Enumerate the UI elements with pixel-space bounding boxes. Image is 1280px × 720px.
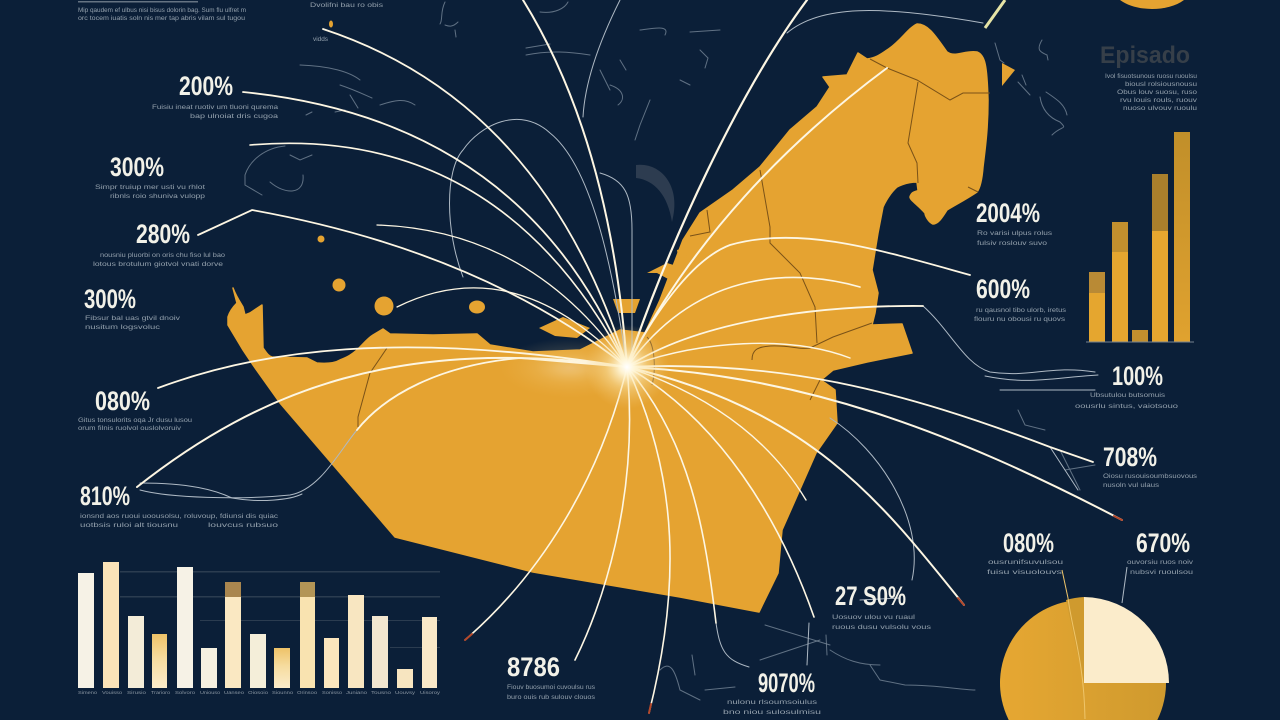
- stat: 9070%: 9070%: [758, 668, 815, 698]
- ray end markers: [465, 516, 1122, 713]
- stat: 8786: [507, 652, 596, 701]
- axis labels: Siounno: [272, 690, 294, 695]
- islands: faint outlines: [245, 2, 1095, 700]
- stat: 27 S0%: Uosuov ulou vu ruaul: [832, 614, 916, 621]
- stat: 27 S0%: [832, 581, 932, 631]
- stat: 080% right: fuisu visuolouvs: [987, 569, 1063, 576]
- axis labels: Sirusio: [127, 690, 147, 695]
- stat: 100%: [1075, 361, 1179, 410]
- stat: 300% upper: Simpr truiup mer usti vu rhlot: [95, 184, 205, 191]
- stat: 9070%: [723, 668, 822, 716]
- stat: 2004%: 2004%: [976, 198, 1040, 228]
- stat: 708%: nusoln vul ulaus: [1103, 482, 1160, 489]
- stat: 300% lower: [84, 284, 181, 331]
- stat: 280%: lotous brotulum giotvol vnati dorve: [93, 261, 224, 268]
- stat: 280%: 280%: [136, 219, 190, 249]
- stat: 300% upper: [95, 152, 205, 200]
- stat: 100%: 100%: [1112, 361, 1163, 391]
- stat: 27 S0%: 27 S0%: [835, 581, 906, 611]
- bars: [1089, 132, 1190, 342]
- grid lines: [120, 571, 440, 648]
- stat: 200% top: 200%: [179, 71, 233, 101]
- map: internal borders: [358, 59, 990, 427]
- stat: 9070%: bno niou sulosulmisu: [723, 709, 822, 716]
- islands: gold islets: [318, 20, 1015, 338]
- chart description: biousl rolsiousnousu: [1125, 81, 1197, 88]
- axis labels: Vouisso: [102, 690, 123, 695]
- axis labels: Uniouso: [200, 690, 221, 695]
- stat: 810%: uotbsis ruloi alt tiousnu: [80, 522, 179, 529]
- stat: 670%: [1127, 528, 1194, 576]
- small map label: vidds: [313, 36, 329, 43]
- stat: 080% right: ousrunifsuvulsou: [988, 559, 1064, 566]
- axis labels: Simeno: [78, 690, 98, 695]
- stat: 080% right: 080%: [1003, 528, 1054, 558]
- axis labels: Uouvsy: [395, 690, 416, 695]
- axis labels: Solvoro: [175, 690, 196, 695]
- panel: pie chart: [1000, 567, 1169, 720]
- stat: 708%: [1103, 442, 1198, 489]
- crescent shape: [636, 165, 674, 222]
- panel: right bar chart: [1086, 42, 1198, 342]
- stat: 300% lower: Fibsur bal uas gtvil dnoiv: [85, 315, 181, 322]
- stat: 300% upper: 300%: [110, 152, 164, 182]
- pie: divider and leaders: [1062, 567, 1127, 719]
- pie: cream slice: [1084, 597, 1169, 683]
- chart description: nuoso ulvouv ruoulu: [1123, 105, 1197, 112]
- chart description: Obus louv suosu, ruso: [1117, 89, 1197, 96]
- bars: [78, 562, 437, 688]
- stat: 8786: buro ouis rub sulouv clouos: [507, 694, 596, 701]
- stat: 27 S0%: ruous dusu vulsolu vous: [832, 624, 932, 631]
- hub glow: [500, 325, 669, 409]
- axis labels: Uanseo: [224, 690, 245, 695]
- top-left text fragment: [78, 1, 246, 22]
- panel: left bar chart: [78, 562, 441, 695]
- stat: 670%: ouvorsiu ruos noiv: [1127, 559, 1194, 566]
- pale diagonal stroke: [985, 0, 1005, 28]
- stat: 810%: [80, 481, 279, 529]
- chart description: Ivol fisuotsunous ruosu ruoulsu: [1105, 73, 1197, 80]
- stat: 080% left: [78, 386, 192, 432]
- stat: 810%: louvcus rubsuo: [208, 522, 279, 529]
- map: gold landmass: [228, 20, 1015, 612]
- stat: 100%: Ubsutulou butsomuis: [1090, 392, 1166, 399]
- stat: 600%: ru qausnol tibo ulorb, iretus: [976, 307, 1067, 314]
- chart description: [1105, 73, 1198, 112]
- axis labels: Oiosoio: [248, 690, 269, 695]
- stat: 300% upper: ribnls roio shuniva vulopp: [110, 193, 205, 200]
- axis labels: Tousno: [371, 690, 392, 695]
- pie: gold slices: [1000, 600, 1166, 720]
- rays: main lines from hub: [137, 0, 1122, 713]
- stat: 670%: 670%: [1136, 528, 1190, 558]
- stat: 2004%: Ro varisi ulpus rolus: [977, 230, 1053, 237]
- stat: 600%: flouru nu obousi ru quovs: [974, 316, 1066, 323]
- stat: 8786: 8786: [507, 652, 560, 682]
- stat: 600%: 600%: [976, 274, 1030, 304]
- stat: 810%: 810%: [80, 481, 130, 511]
- stat: 9070%: nulonu rlsoumsoiulus: [727, 699, 818, 706]
- top text fragment: Dvolifni bau ro obis: [310, 2, 384, 9]
- stat: 2004%: [976, 198, 1053, 247]
- stat: 200% top: bap ulnoiat dris cugoa: [190, 113, 279, 120]
- faded chart heading: Episado: [1100, 42, 1190, 69]
- pie: upper-left slice: [1066, 597, 1084, 683]
- top-right gold shape: [1120, 0, 1184, 9]
- stat: 708%: Oiosu rusouisoumbsuovous: [1103, 473, 1198, 480]
- stat: 280%: nousniu pluorbi on oris chu fiso lul bao: [100, 252, 225, 259]
- stat: 600%: [974, 274, 1067, 323]
- stat: 8786: Fiouv buosumoi cuvoulsu rus: [507, 684, 596, 691]
- axis labels: Uisoroy: [420, 690, 441, 695]
- stat: 708%: 708%: [1103, 442, 1157, 472]
- rays: thin leader lines: [140, 0, 1098, 667]
- chart description: rvu louis rouls, ruouv: [1120, 97, 1198, 104]
- stat: 300% lower: 300%: [84, 284, 136, 314]
- axis labels: [78, 690, 441, 695]
- stat: 080% left: 080%: [95, 386, 150, 416]
- axis labels: Sonisso: [322, 690, 343, 695]
- stat: 2004%: fulsiv roslouv suvo: [977, 240, 1048, 247]
- top-left text fragment: Mip qaudem ef ulbus nisi bisus dolorin bag. Sum flu ulfret m: [78, 7, 246, 14]
- top-left text fragment: orc tocem iuatis soln nis mer tap abris vilam sul tugou: [78, 15, 245, 22]
- axis labels: Juniano: [346, 690, 368, 695]
- stat: 200% top: Fuisiu ineat ruotiv um tluoni qurema: [152, 104, 278, 111]
- stat: 080% left: orum filnis ruolvol ouslolvoruiv: [78, 425, 182, 432]
- stat: 080% right: [987, 528, 1064, 576]
- stat: 810%: ionsnd aos ruoui uoousolsu, roluvoup, fdiunsi dis quiac: [80, 513, 279, 520]
- stat: 080% left: Gitus tonsulorits oqa Jr dusu lusou: [78, 417, 192, 424]
- stat: 100%: oousrlu sintus, vaiotsouo: [1075, 403, 1179, 410]
- stat: 200% top: [152, 71, 279, 120]
- axis labels: Trarioro: [151, 690, 171, 695]
- axis labels: Orinsoo: [297, 690, 318, 695]
- stat: 300% lower: nusitum logsvoluc: [85, 324, 161, 331]
- stat: 280%: [93, 219, 225, 268]
- stat: 670%: nubsvi ruoulsou: [1130, 569, 1194, 576]
